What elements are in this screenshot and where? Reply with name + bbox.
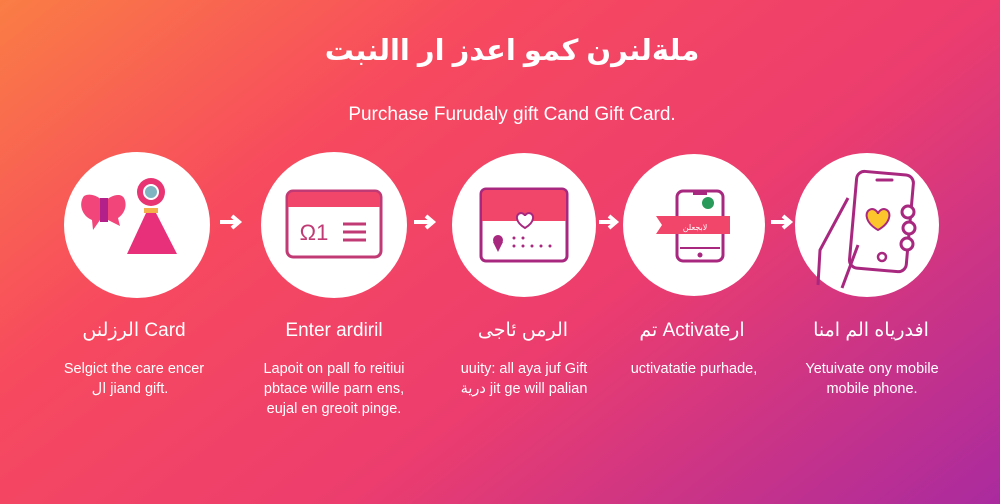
step 2 text: eujal en greoit pinge. xyxy=(267,401,401,417)
step 4 text xyxy=(631,320,757,377)
step 3 text xyxy=(461,320,587,397)
arrow 3 xyxy=(599,216,616,228)
step 3 text: الرمں ئاجی xyxy=(478,320,568,341)
step 4 circle icon: phone with ribbon: لابجعلن xyxy=(683,223,707,232)
step 1 text: الرزلنں Card xyxy=(82,320,186,341)
step 5 text: افدرياه الم امنا xyxy=(813,320,929,341)
step 2 circle icon: card xyxy=(261,152,407,298)
arrow 4 xyxy=(771,216,790,228)
step 5 text xyxy=(805,320,939,397)
arrow 1 xyxy=(220,216,239,228)
step 3 text: دریة jit ge will palian xyxy=(461,381,587,397)
title: ملةلنرن كمو اعدز ار االنبت xyxy=(325,35,699,67)
step 2 text: Enter ardiril xyxy=(285,320,383,341)
step 2 circle icon: card: Ω1 xyxy=(300,220,328,245)
arrow 2 xyxy=(414,216,433,228)
step 5 text: mobile phone. xyxy=(826,381,918,397)
step 4 circle icon: phone with ribbon xyxy=(623,154,765,296)
step 1 text xyxy=(64,320,204,397)
step 5 text: Yetuivate ony mobile xyxy=(805,361,939,377)
step 1 text: Selgict the care encer xyxy=(64,361,204,377)
step 1 text: ال jiand gift. xyxy=(92,381,168,397)
step 2 text: pbtace wille parn ens, xyxy=(264,381,404,397)
step 4 text: تم Activateار xyxy=(639,320,745,341)
step 2 text: Lapoit on pall fo reitiui xyxy=(263,361,405,377)
step 3 circle icon: card with heart xyxy=(452,153,596,297)
step 2 text xyxy=(263,320,405,417)
step 4 text: uctivatatie purhade, xyxy=(631,361,757,377)
step 5 circle icon: hand holding phone xyxy=(795,153,939,297)
subtitle: Purchase Furudaly gift Cand Gift Card. xyxy=(348,104,676,125)
step 1 circle icon: gifts xyxy=(64,152,210,298)
step 3 text: uuity: all aya juf Gift xyxy=(461,361,587,377)
